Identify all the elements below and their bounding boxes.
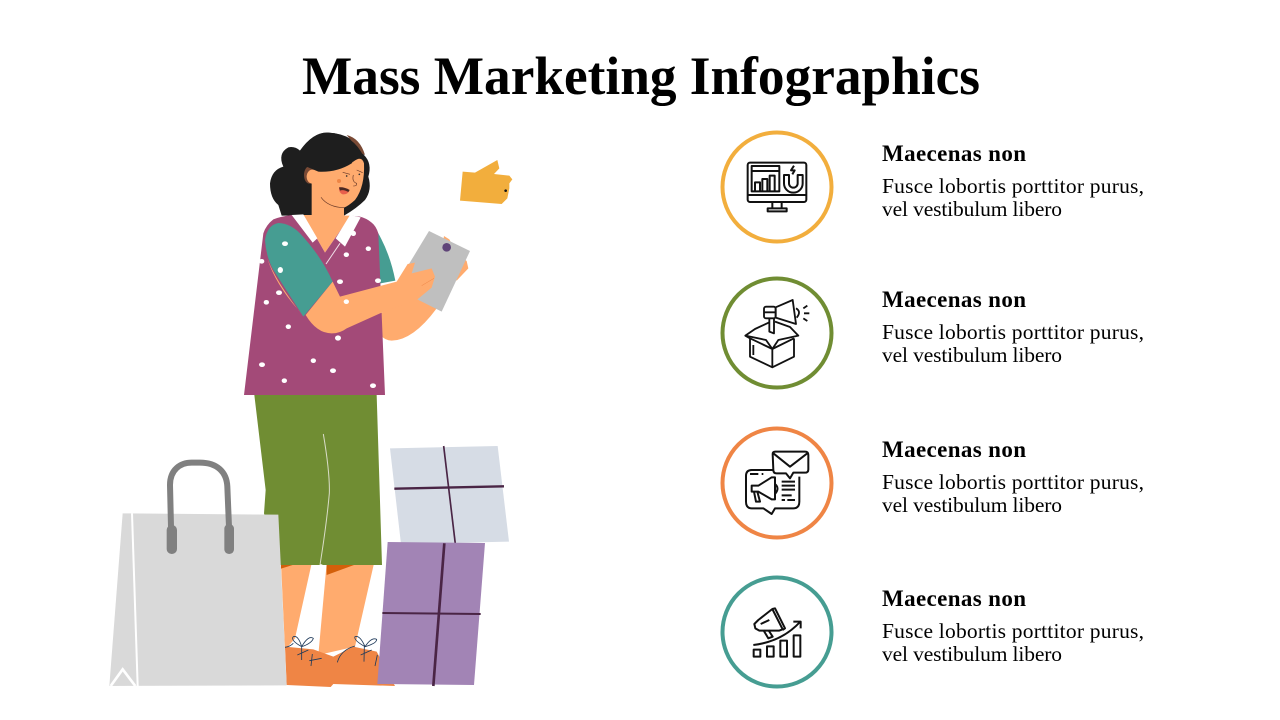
item 1 <box>722 132 1144 242</box>
description: Fusce lobortis porttitor purus, <box>882 470 1144 494</box>
icon: megaphone in box <box>745 300 809 367</box>
face and neck <box>303 159 364 253</box>
circle badge <box>722 278 832 388</box>
description: Fusce lobortis porttitor purus, <box>882 174 1144 198</box>
shirt dots <box>259 231 381 388</box>
item 3 <box>722 428 1144 538</box>
tablet <box>403 231 470 312</box>
fringe <box>300 133 364 172</box>
item 4 <box>722 578 1144 686</box>
icon: megaphone and envelope message <box>746 452 808 514</box>
description line 2: vel vestibulum libero <box>882 343 1062 367</box>
shopping bag <box>109 463 287 686</box>
title: Mass Marketing Infographics <box>302 46 980 106</box>
gift box: bottom <box>377 542 485 686</box>
item 2 <box>722 278 1144 388</box>
description: Fusce lobortis porttitor purus, <box>882 320 1144 344</box>
back sleeve <box>372 232 395 285</box>
front arm and hand <box>306 263 435 333</box>
circle badge <box>722 578 832 686</box>
ear <box>304 166 315 184</box>
icon: thumbs up <box>460 160 512 204</box>
lower body: shorts and legs <box>254 395 395 687</box>
shopping bag and gift boxes <box>109 446 509 686</box>
description line 2: vel vestibulum libero <box>882 642 1062 666</box>
description line 2: vel vestibulum libero <box>882 197 1062 221</box>
circle badge <box>722 428 832 538</box>
back arm <box>375 293 437 341</box>
icon: megaphone with growth chart <box>753 608 801 657</box>
heading: Maecenas non <box>882 287 1026 312</box>
hair <box>270 133 370 216</box>
circle badge <box>722 132 832 242</box>
shirt <box>244 215 385 395</box>
collar <box>292 214 361 247</box>
left sleeve <box>265 223 333 317</box>
facial features <box>321 170 363 208</box>
upper body: woman with tablet <box>244 133 512 395</box>
heading: Maecenas non <box>882 437 1026 462</box>
description line 2: vel vestibulum libero <box>882 493 1062 517</box>
heading: Maecenas non <box>882 141 1026 166</box>
description: Fusce lobortis porttitor purus, <box>882 619 1144 643</box>
heading: Maecenas non <box>882 586 1026 611</box>
gift box: top <box>390 446 509 544</box>
icon: monitor with chart and magnet <box>748 163 806 211</box>
illustration: woman with shopping bag and gift boxes <box>109 133 512 687</box>
